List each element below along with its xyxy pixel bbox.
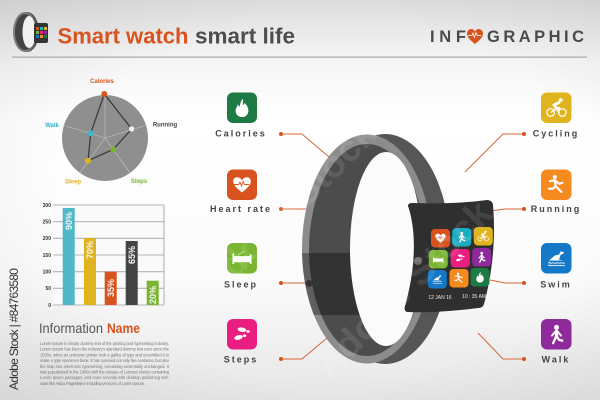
watermark: Adobe Stock — [307, 192, 501, 386]
watch band rim — [302, 134, 432, 364]
icon: small watch logo — [13, 12, 48, 52]
infographic wordmark: GRAPHIC — [487, 28, 584, 46]
metric: cycling: Cycling — [533, 128, 579, 138]
infographic wordmark — [430, 28, 584, 46]
watermark — [192, 112, 501, 386]
information heading: Information — [39, 320, 103, 336]
icon: heart in wordmark — [467, 29, 483, 44]
metric: sleep — [224, 243, 258, 290]
bar value labels: 65% — [127, 246, 137, 264]
metric: steps: Steps — [224, 354, 258, 364]
header rule — [12, 56, 587, 58]
information paragraph: 1500s, when an unknown printer took a galley of type and scrambled it to — [40, 352, 170, 357]
metric: walk: Walk — [542, 354, 570, 364]
metric: running: Running — [531, 204, 581, 214]
watch date and time: 12 JAN 16 — [428, 295, 452, 301]
radar labels: Running — [153, 122, 177, 128]
watch crown button — [414, 257, 422, 265]
bars — [63, 208, 159, 305]
watch opening — [350, 152, 422, 346]
radar points — [85, 91, 135, 164]
information paragraph: ware like Aldus PageMaker including versions of Lorem Ipsum. — [40, 381, 145, 386]
radar labels: Calories — [90, 79, 114, 85]
information paragraph: Lorem Ipsum is simply dummy text of the printing and typesetting industry. — [40, 341, 169, 346]
metric: calories: Calories — [215, 128, 267, 138]
information paragraph: Lorem Ipsum passages, and more recently with desktop publishing soft- — [40, 375, 170, 380]
metric: sleep: Sleep — [224, 280, 258, 290]
metric: swim — [540, 243, 572, 290]
watch date and time — [428, 294, 486, 301]
information paragraph: the leap into electronic typesetting, remaining essentially unchanged. It — [40, 364, 170, 369]
watch band inner wall — [309, 144, 425, 356]
stock credit: Adobe Stock | #84763580 — [7, 268, 21, 390]
bar axis labels: 50 — [45, 286, 51, 292]
bar axis labels: 100 — [43, 270, 51, 276]
bar axis labels: 150 — [43, 253, 51, 259]
information paragraph: Lorem Ipsum has been the industry's standard dummy text ever since the — [40, 347, 170, 352]
watch screen body — [405, 200, 494, 312]
connector dots — [279, 132, 526, 361]
radar disc — [62, 95, 148, 181]
radar chart — [45, 79, 177, 186]
radar labels: Walk — [45, 123, 60, 129]
metric: calories — [215, 92, 267, 138]
metric: heart rate: Heart rate — [210, 204, 272, 214]
bar value labels — [64, 212, 158, 304]
bar value labels: 35% — [106, 279, 116, 297]
bar chart — [43, 203, 165, 309]
smart watch — [302, 134, 494, 364]
title: Smart watch — [58, 24, 189, 48]
watch band shaded strip — [302, 253, 360, 315]
radar polygon — [88, 94, 132, 161]
bar axis labels: 200 — [43, 236, 51, 242]
bar axis labels — [43, 203, 51, 309]
metric: running — [531, 170, 581, 214]
metric: cycling — [533, 92, 579, 138]
watch app icons — [428, 227, 493, 288]
watermark: Adobe Stock — [192, 112, 386, 306]
title — [58, 24, 295, 48]
infographic wordmark: INF — [430, 28, 466, 46]
information paragraph: make a type specimen book. It has survived not only five centuries, but also — [40, 358, 170, 363]
information heading: Name — [107, 320, 140, 336]
watch date and time: 10 : 35 AM — [462, 294, 486, 300]
watch band outer face — [320, 134, 450, 364]
bar value labels: 90% — [64, 212, 74, 230]
radar labels: Sleep — [65, 180, 81, 186]
bar axis labels: 300 — [43, 203, 51, 209]
title: smart life — [195, 24, 295, 48]
bar value labels: 20% — [148, 286, 158, 304]
connector lines — [281, 134, 524, 359]
metric: heart rate — [210, 170, 272, 214]
bar value labels: 70% — [85, 241, 95, 259]
side button — [306, 280, 312, 287]
information paragraph — [40, 341, 170, 386]
metric: walk — [541, 319, 572, 364]
information heading — [39, 320, 140, 336]
radar labels: Steps — [131, 179, 148, 185]
radar labels — [45, 79, 177, 186]
metric: steps — [224, 319, 258, 364]
bar axis labels: 0 — [48, 303, 51, 309]
information paragraph: was popularised in the 1960s with the release of Letraset sheets containing — [40, 370, 170, 374]
bar axis labels: 250 — [43, 220, 51, 226]
metric: swim: Swim — [540, 280, 572, 290]
